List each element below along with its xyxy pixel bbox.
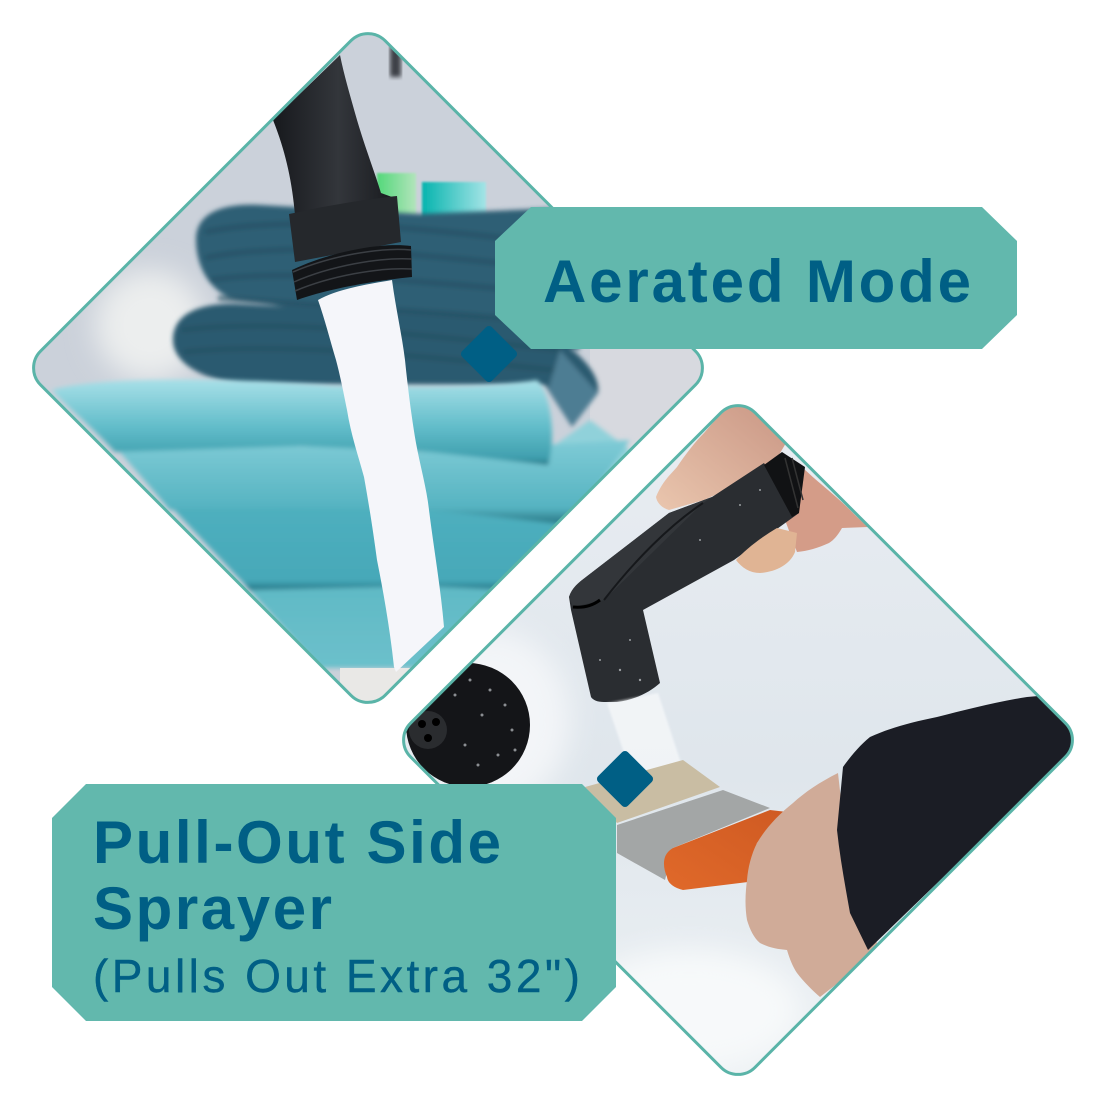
water stream <box>318 280 444 672</box>
drain <box>406 663 530 787</box>
callout: pull-out side sprayer <box>52 784 616 1021</box>
text: pulls out extra 32 inches: (Pulls Out Extra 32") <box>93 950 580 1002</box>
faucet spout <box>273 55 412 300</box>
sprayer <box>569 452 805 702</box>
icon: sprayer diamond marker <box>595 749 655 809</box>
top hand <box>656 402 868 552</box>
panel: side sprayer photo <box>390 390 1090 1090</box>
heading: pull-out side sprayer <box>93 809 501 942</box>
callout: aerated mode <box>495 207 1017 349</box>
finger over sprayer <box>736 528 797 573</box>
heading: pull-out side sprayer: Sprayer <box>93 875 332 942</box>
panel: aerated mode photo <box>20 20 720 720</box>
sleeve <box>837 695 1085 950</box>
wall hook <box>390 45 401 77</box>
lower hand <box>746 773 880 997</box>
background bottles <box>377 173 486 224</box>
paint brush <box>585 760 787 890</box>
icon: aerated diamond marker <box>459 324 519 384</box>
teal towels <box>52 380 630 668</box>
spray <box>607 694 680 770</box>
heading: aerated mode: Aerated Mode <box>543 248 971 315</box>
dark towels <box>173 205 598 427</box>
heading: pull-out side sprayer: Pull-Out Side <box>93 809 501 876</box>
